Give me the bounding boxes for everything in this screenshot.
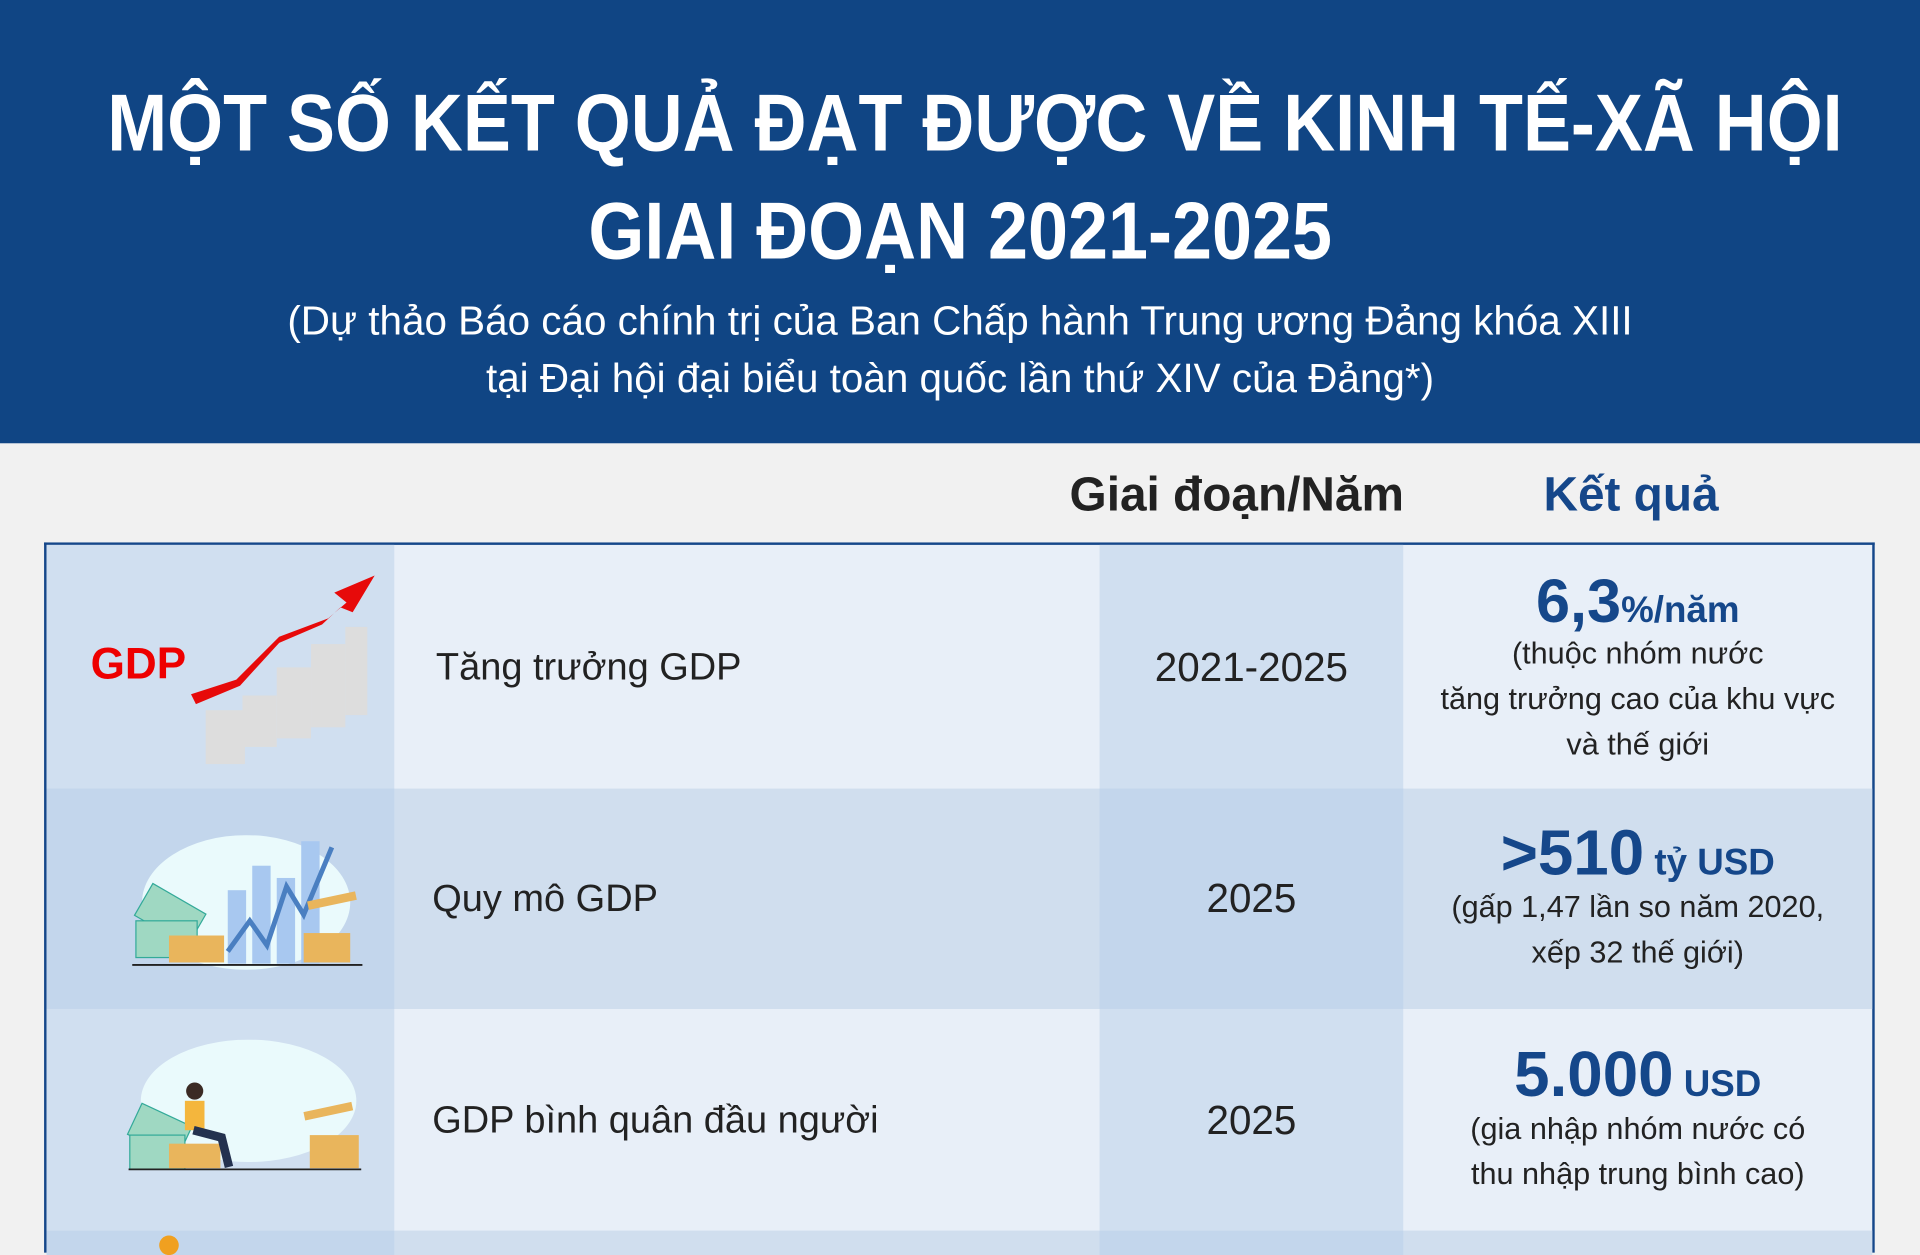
subtitle: tại Đại hội đại biểu toàn quốc lần thứ XIV của Đảng*) <box>486 355 1434 400</box>
row 4 (partial) <box>47 1231 1872 1255</box>
result: >510 tỷ USD <box>1501 818 1775 889</box>
icon: orange circle <box>159 1236 179 1255</box>
icon: GDP arrow chart <box>91 576 375 764</box>
result: (gấp 1,47 lần so năm 2020, <box>1451 890 1824 924</box>
header banner <box>0 0 1920 443</box>
table <box>44 542 1875 1253</box>
result: 6,3%/năm <box>1536 567 1740 636</box>
subtitle: (Dự thảo Báo cáo chính trị của Ban Chấp hành Trung ương Đảng khóa XIII <box>287 298 1633 343</box>
period: 2021-2025 <box>1155 643 1348 689</box>
result <box>1440 567 1835 762</box>
result: và thế giới <box>1566 727 1709 762</box>
label: Quy mô GDP <box>432 877 658 920</box>
result: (thuộc nhóm nước <box>1512 637 1764 671</box>
result: 5.000 USD <box>1514 1039 1761 1110</box>
period: 2025 <box>1206 1097 1296 1142</box>
result: xếp 32 thế giới) <box>1532 936 1744 970</box>
icon: GDP arrow chart: GDP <box>91 639 186 688</box>
row 1 <box>46 544 1835 788</box>
label: Tăng trưởng GDP <box>436 645 742 688</box>
row 2 <box>47 789 1872 1009</box>
column header: result: Kết quả <box>1543 469 1719 522</box>
label: GDP bình quân đầu người <box>432 1098 879 1141</box>
subtitle <box>287 298 1633 400</box>
row 3 <box>46 1009 1805 1230</box>
result <box>1470 1039 1805 1191</box>
result: thu nhập trung bình cao) <box>1471 1157 1805 1191</box>
result: tăng trưởng cao của khu vực <box>1440 682 1835 716</box>
title line 2: GIAI ĐOẠN 2021-2025 <box>588 185 1332 276</box>
icon: person with money <box>126 1040 362 1170</box>
column header: period: Giai đoạn/Năm <box>1070 469 1404 522</box>
result: (gia nhập nhóm nước có <box>1470 1111 1805 1146</box>
period: 2025 <box>1206 876 1296 921</box>
icon: money and chart <box>132 835 362 970</box>
title line 1: MỘT SỐ KẾT QUẢ ĐẠT ĐƯỢC VỀ KINH TẾ-XÃ HỘI <box>107 77 1843 168</box>
result <box>1451 818 1824 970</box>
